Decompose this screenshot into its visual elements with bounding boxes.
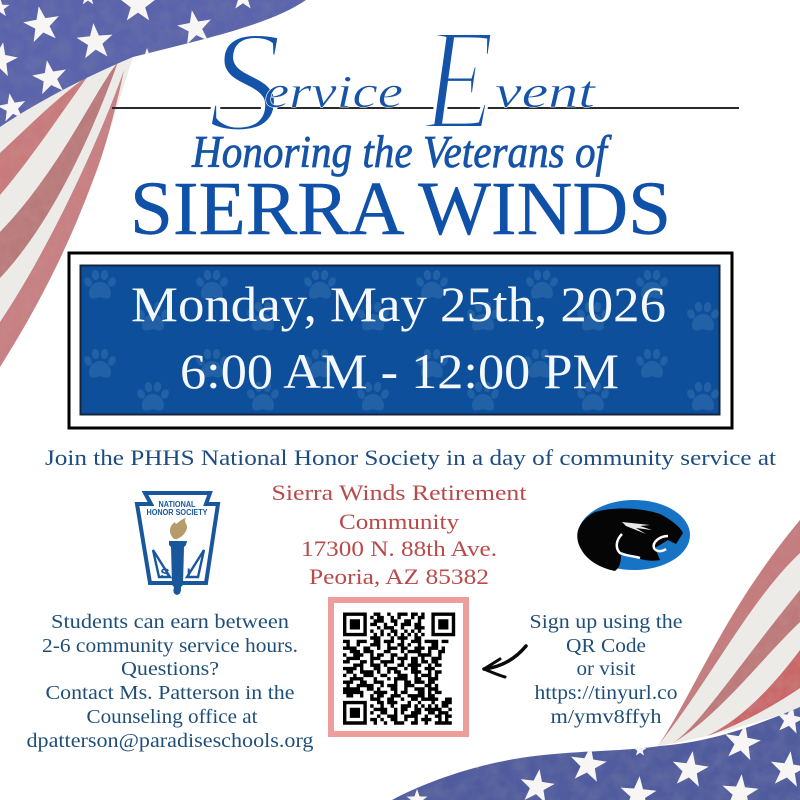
flag: bottom-right corner (392, 520, 800, 800)
invitation line: Join the PHHS National Honor Society in a day of community service at (45, 445, 776, 470)
time: 6:00 AM - 12:00 PM (180, 343, 619, 399)
address (272, 480, 526, 589)
subtitle: Honoring the Veterans of (191, 127, 612, 177)
QR code (331, 600, 466, 734)
text block: service hours and contact (26, 611, 314, 752)
text block: service hours and contact: Contact Ms. Patterson in the (46, 682, 295, 704)
text block: service hours and contact: Counseling office at (86, 706, 258, 728)
text block: sign up: QR Code (566, 635, 646, 657)
arrow to QR code (484, 646, 526, 677)
icon: National Honor Society keystone: S (160, 565, 170, 581)
icon: National Honor Society keystone: HONOR SOCIETY (146, 508, 208, 517)
icon: National Honor Society keystone: NATIONAL (158, 500, 196, 509)
text block: service hours and contact: Students can earn between (51, 611, 289, 633)
title: script heading with rule: S (208, 2, 282, 162)
title: script heading with rule (112, 0, 739, 162)
address: Peoria, AZ 85382 (309, 564, 489, 589)
text block: service hours and contact: Questions? (121, 658, 219, 680)
title: script heading with rule: vent (495, 66, 597, 117)
address: Sierra Winds Retirement (272, 480, 526, 505)
icon: National Honor Society keystone (137, 493, 218, 595)
text block: sign up: Sign up using the (530, 611, 683, 633)
text block: service hours and contact: dpatterson@paradiseschools.org (26, 730, 314, 752)
date: Monday, May 25th, 2026 (131, 276, 666, 332)
headline: SIERRA WINDS (130, 167, 671, 251)
title: script heading with rule: ervice (264, 66, 403, 117)
flag: top-left corner (0, 0, 306, 367)
icon: National Honor Society keystone: L (187, 565, 196, 581)
text block: sign up: or visit (576, 658, 636, 680)
text block: sign up: m/ymv8ffyh (550, 706, 662, 728)
QR data modules (343, 614, 452, 723)
text block: sign up (530, 611, 683, 728)
address: Community (339, 509, 459, 534)
icon: panther logo (577, 500, 690, 571)
QR finder patterns (343, 612, 455, 725)
address: 17300 N. 88th Ave. (301, 536, 497, 561)
paw pattern (83, 269, 720, 411)
title: script heading with rule: E (422, 0, 494, 160)
text block: sign up: https://tinyurl.co (534, 682, 678, 704)
panel: date and time (69, 253, 732, 428)
text block: service hours and contact: 2-6 community service hours. (42, 635, 298, 657)
